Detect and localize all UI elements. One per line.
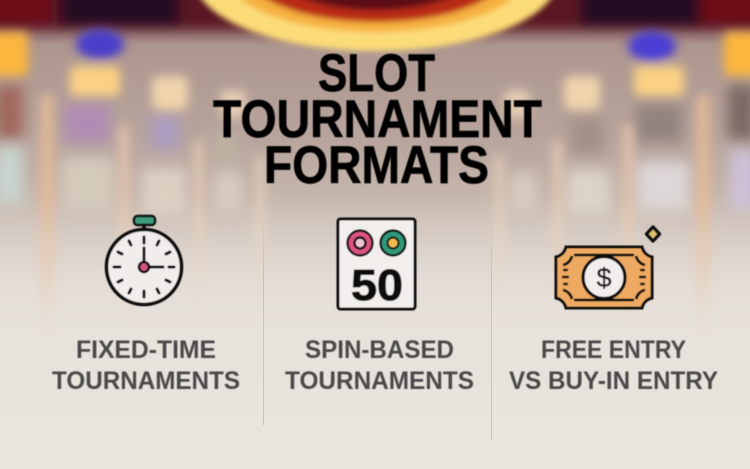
top lights band xyxy=(0,0,750,118)
label: spin-based tournaments: SPIN-BASED xyxy=(305,336,454,364)
label: spin-based tournaments xyxy=(285,336,474,395)
arched columns xyxy=(40,95,710,325)
title xyxy=(213,44,542,195)
icon: spin counter 50: 50 xyxy=(351,261,403,310)
title: FORMATS xyxy=(264,136,489,195)
label: free entry vs buy-in entry: FREE ENTRY xyxy=(541,336,686,364)
label: fixed-time tournaments: TOURNAMENTS xyxy=(52,367,240,395)
title: TOURNAMENT xyxy=(213,90,542,149)
dividers xyxy=(263,215,492,440)
label: fixed-time tournaments xyxy=(52,336,240,395)
label: free entry vs buy-in entry xyxy=(509,336,718,395)
icon: stopwatch xyxy=(106,216,182,304)
icon: banknote with dollar sign: $ xyxy=(596,263,612,293)
icon: spin counter 50 xyxy=(338,219,415,310)
title: SLOT xyxy=(318,44,435,103)
label: spin-based tournaments: TOURNAMENTS xyxy=(285,367,474,395)
machine cabinets xyxy=(0,85,750,214)
icon: banknote with dollar sign xyxy=(556,227,660,308)
label: fixed-time tournaments: FIXED-TIME xyxy=(76,336,216,364)
label: free entry vs buy-in entry: VS BUY-IN ENTRY xyxy=(509,367,718,395)
